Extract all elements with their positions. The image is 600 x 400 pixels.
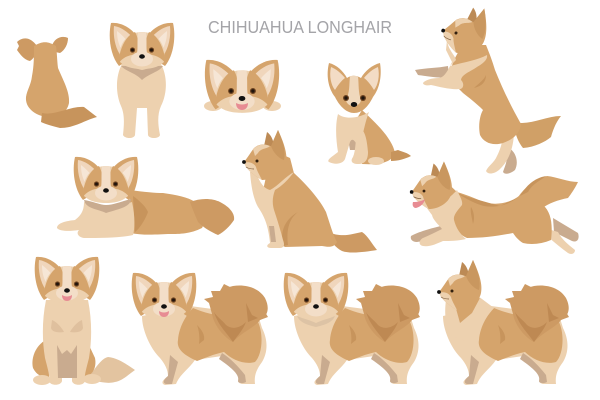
- dog: sitting side view: [242, 130, 377, 253]
- dog: running: [410, 162, 579, 254]
- dog: lying head peeking: [204, 60, 281, 113]
- dog: sitting front view: [32, 257, 135, 385]
- dog: jumping upright: [415, 0, 561, 174]
- dog: lying down: [57, 157, 234, 238]
- dog: standing with front-facing head and tongue: [132, 273, 268, 385]
- dog: standing in side profile: [437, 260, 569, 385]
- dog: seen from behind: [17, 37, 97, 128]
- dog: sitting puppy: [328, 63, 411, 165]
- dog: front standing: [110, 23, 174, 138]
- title: CHIHUAHUA LONGHAIR: [208, 17, 392, 37]
- dog: standing with front-facing head: [284, 273, 420, 385]
